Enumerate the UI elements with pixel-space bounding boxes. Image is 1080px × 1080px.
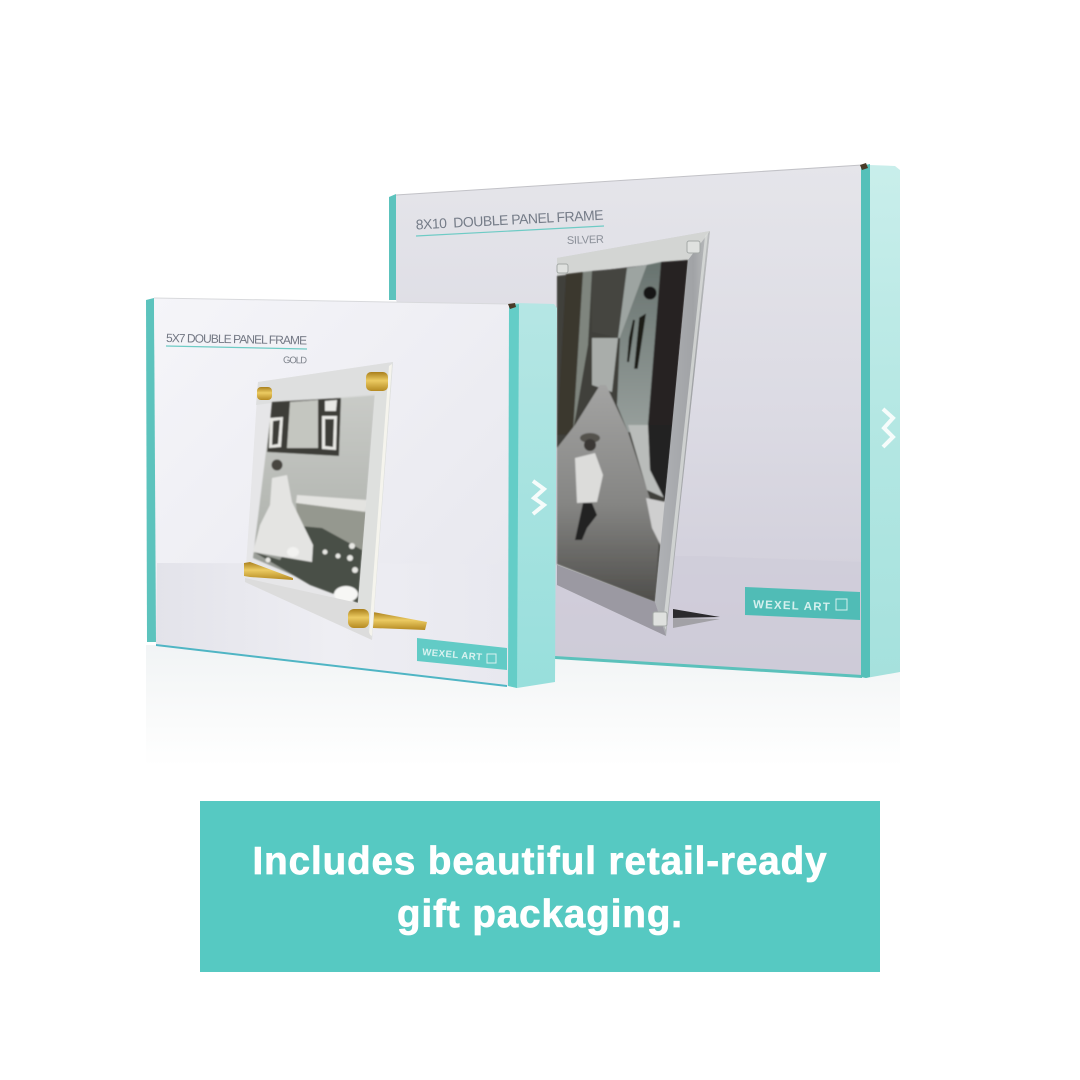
large box left flap xyxy=(389,194,396,300)
large box subtitle: SILVER xyxy=(567,234,604,247)
small frame gold stand xyxy=(373,612,427,630)
child figure xyxy=(575,433,603,540)
large box spine xyxy=(862,165,900,678)
large frame hardware xyxy=(557,241,700,626)
small box subtitle: GOLD xyxy=(283,355,307,366)
large frame photo: alley and child xyxy=(557,260,688,602)
caption banner: gift packaging. xyxy=(397,893,683,936)
small acrylic frame xyxy=(245,362,393,640)
small box front face xyxy=(154,298,510,686)
large box front face xyxy=(396,165,862,677)
large box title: 8X10 DOUBLE PANEL FRAME xyxy=(415,207,604,232)
icon: large box W logo xyxy=(883,409,893,447)
icon: small box W logo xyxy=(533,481,544,514)
large box Wexel tag xyxy=(745,587,860,620)
small box title: 5X7 DOUBLE PANEL FRAME xyxy=(166,331,307,347)
small box Wexel tag: WEXEL ART xyxy=(422,647,483,663)
small box spine xyxy=(509,303,557,688)
caption banner xyxy=(200,801,880,972)
product photo: two boxed frames xyxy=(146,163,900,696)
large box: 8x10 silver xyxy=(389,163,900,678)
floor reflection xyxy=(146,645,900,767)
large frame stand xyxy=(673,609,720,618)
small frame photo: bride by house xyxy=(253,395,375,603)
caption banner: Includes beautiful retail-ready xyxy=(252,840,828,883)
small frame gold pins xyxy=(244,372,388,628)
large acrylic frame xyxy=(557,231,710,636)
small box Wexel tag xyxy=(417,638,507,670)
small box: 5x7 gold xyxy=(146,298,557,688)
small box left flap xyxy=(146,298,157,642)
large box Wexel tag: WEXEL ART xyxy=(753,599,831,614)
